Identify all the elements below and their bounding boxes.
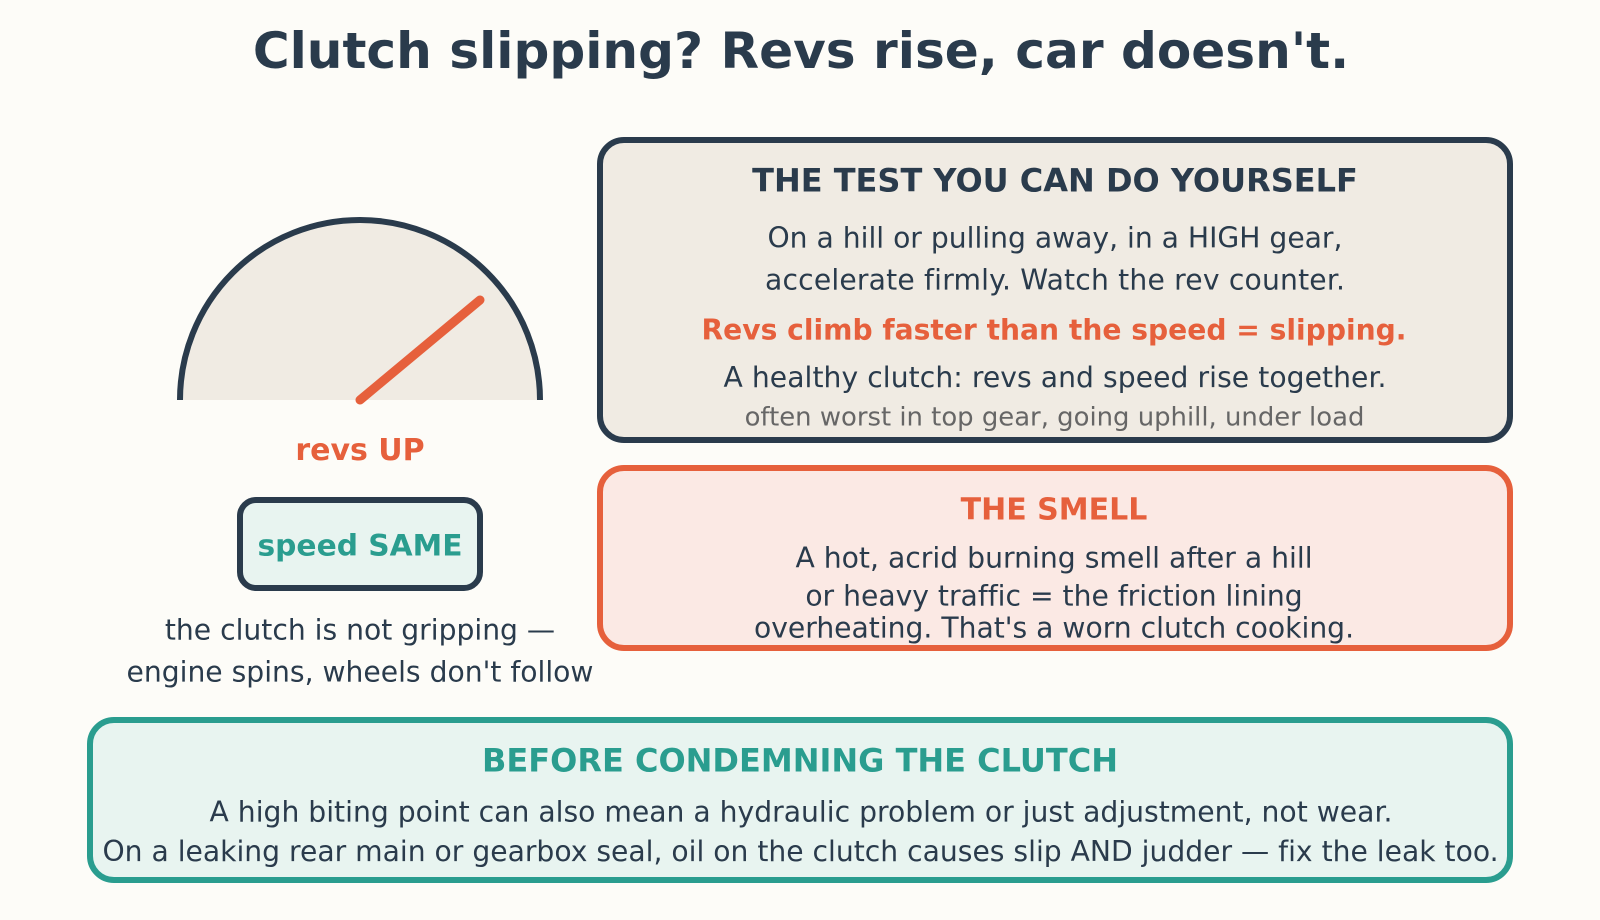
panel: the smell (600, 468, 1510, 648)
panel: the test (600, 140, 1510, 440)
panel: the smell: A hot, acrid burning smell after a hill (795, 542, 1313, 574)
label: revs up: revs UP (295, 433, 425, 468)
panel: the smell: or heavy traffic = the friction lining (805, 580, 1303, 612)
panel: the test: Revs climb faster than the speed = slipping. (702, 314, 1406, 346)
panel: before condemning the clutch: A high biting point can also mean a hydraulic problem or just adjustment, not wear. (210, 796, 1392, 828)
title: Clutch slipping? Revs rise, car doesn't. (253, 21, 1349, 80)
panel: the test: often worst in top gear, going uphill, under load (745, 402, 1364, 432)
panel: the test: A healthy clutch: revs and speed rise together. (724, 361, 1386, 394)
panel: before condemning the clutch: On a leaking rear main or gearbox seal, oil on the clutch causes slip AND judder — fix the leak too. (102, 835, 1499, 868)
explanation text (127, 614, 593, 688)
panel: before condemning the clutch (90, 720, 1510, 880)
explanation text: engine spins, wheels don't follow (127, 656, 593, 688)
panel: the test: accelerate firmly. Watch the rev counter. (765, 264, 1345, 296)
explanation text: the clutch is not gripping — (165, 614, 555, 646)
panel: the test: THE TEST YOU CAN DO YOURSELF (752, 162, 1358, 200)
panel: the smell: overheating. That's a worn clutch cooking. (754, 612, 1354, 644)
panel: the smell: THE SMELL (961, 492, 1147, 528)
panel: before condemning the clutch: BEFORE CONDEMNING THE CLUTCH (482, 742, 1118, 780)
speed box (240, 500, 480, 588)
speed box: speed SAME (258, 528, 462, 564)
panel: the test: On a hill or pulling away, in a HIGH gear, (768, 222, 1342, 254)
gauge: rev counter (180, 220, 540, 400)
